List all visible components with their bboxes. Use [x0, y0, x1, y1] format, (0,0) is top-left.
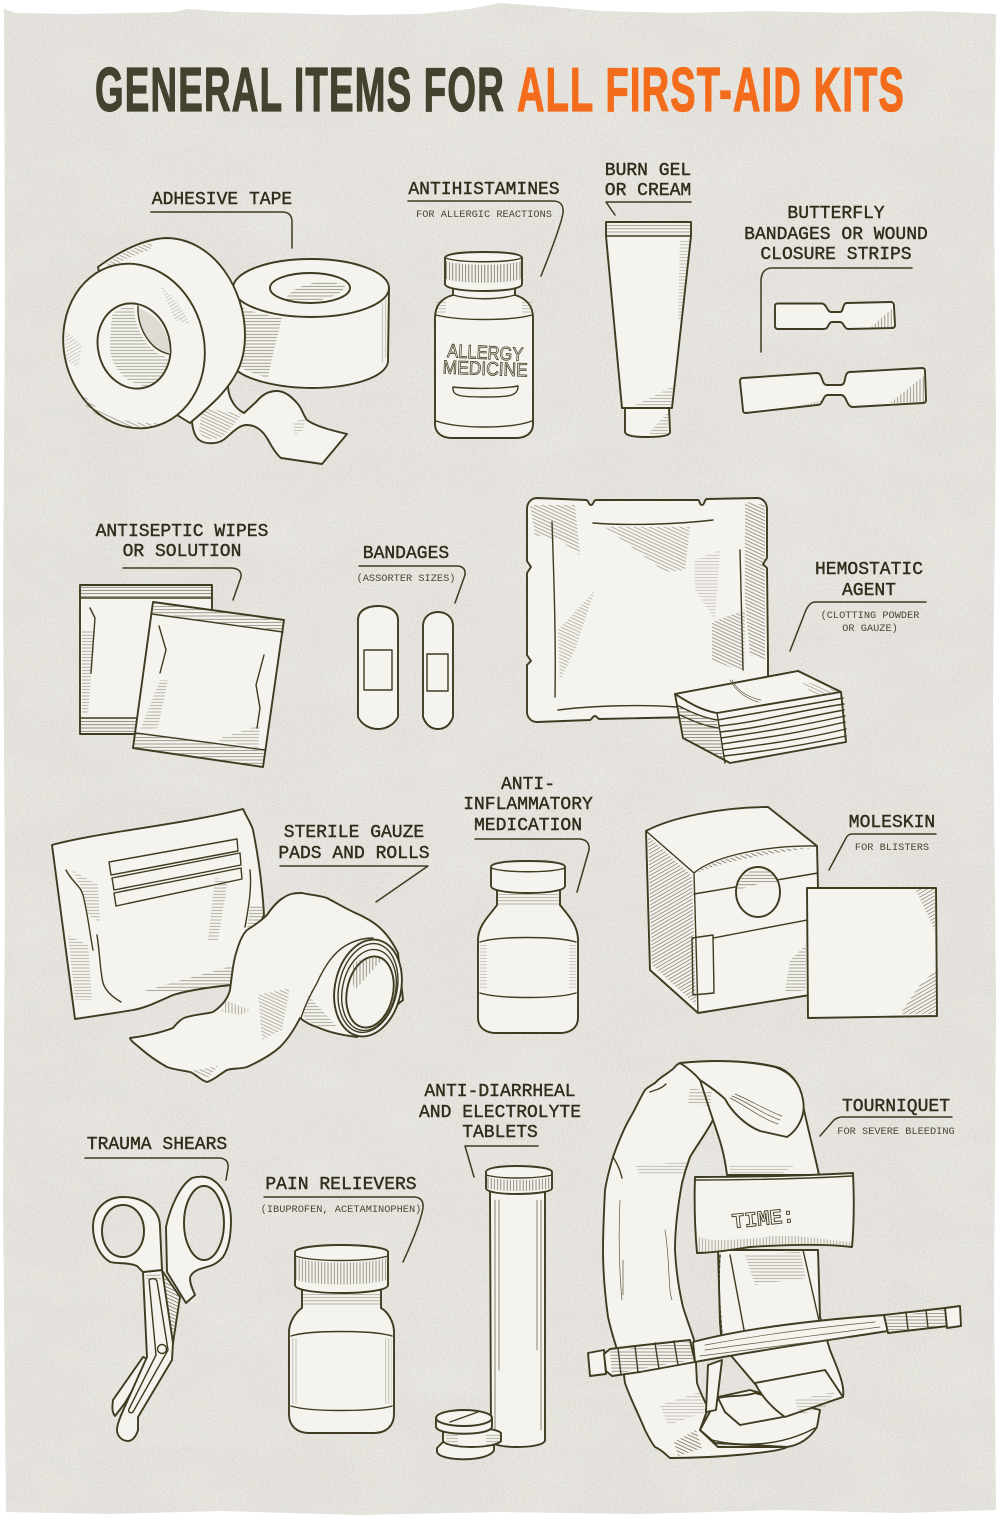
sublabel: ibuprofen: (IBUPROFEN, ACETAMINOPHEN) — [261, 1204, 421, 1216]
label: antiseptic wipes: ANTISEPTIC WIPES — [96, 522, 268, 542]
item: pain relievers — [261, 1175, 423, 1433]
title: GENERAL ITEMS FOR — [95, 55, 505, 125]
icon: tilted tape roll — [46, 238, 245, 443]
leader: antiseptic — [123, 568, 241, 600]
label: burn gel: BURN GEL — [605, 161, 691, 181]
item: butterfly bandages: CLOSURE STRIPS — [760, 245, 912, 265]
icon: tablets — [436, 1410, 501, 1459]
leader: gauze — [280, 866, 428, 902]
icon: allergy medicine bottle: MEDICINE — [442, 358, 528, 381]
icon: moleskin pad — [807, 888, 937, 1018]
leader: antihistamines — [408, 201, 563, 276]
icon: medication bottle — [478, 861, 578, 1033]
item: anti-diarrheal tablets: AND ELECTROLYTE — [419, 1103, 581, 1123]
item: moleskin — [646, 807, 937, 1018]
item: gauze pads and rolls — [52, 809, 430, 1082]
strap back — [700, 1062, 819, 1175]
icon: gauze roll — [130, 893, 410, 1082]
item: butterfly bandages — [740, 204, 928, 413]
leader: bandages — [359, 566, 465, 603]
sublabel: severe bleeding: FOR SEVERE BLEEDING — [837, 1126, 955, 1138]
label: bandages: BANDAGES — [363, 544, 449, 564]
time band — [695, 1173, 854, 1253]
icon: tourniquet — [588, 1061, 961, 1458]
icon: gauze stack — [675, 671, 846, 763]
icon: trauma shears — [93, 1177, 231, 1441]
icon: allergy medicine bottle — [435, 252, 533, 438]
item: tourniquet — [588, 1061, 961, 1458]
outer band — [603, 1063, 787, 1458]
leader: burn gel — [606, 202, 691, 215]
item: anti-diarrheal tablets: TABLETS — [462, 1123, 538, 1143]
time text: TIME: — [731, 1206, 796, 1235]
label: anti-diarrheal: ANTI-DIARRHEAL — [424, 1082, 576, 1102]
leader: pain relievers — [264, 1197, 423, 1262]
item: burn gel — [605, 161, 691, 437]
leader: tourniquet — [820, 1117, 952, 1136]
sublabel: clotting: (CLOTTING POWDER — [821, 610, 919, 622]
item: hemostatic agent — [527, 498, 926, 763]
label: tourniquet: TOURNIQUET — [842, 1097, 950, 1117]
item: gauze pads and rolls: PADS AND ROLLS — [278, 844, 430, 864]
item: burn gel: OR CREAM — [605, 181, 691, 201]
label: adhesive tape: ADHESIVE TAPE — [152, 190, 292, 210]
item: antihistamines — [408, 180, 563, 438]
left handle — [93, 1197, 162, 1272]
label: pain relievers: PAIN RELIEVERS — [265, 1175, 417, 1195]
sublabel: allergic reactions: FOR ALLERGIC REACTIONS — [416, 209, 552, 221]
item: anti-inflammatory: INFLAMMATORY — [463, 795, 593, 815]
icon: narrow bandage — [423, 612, 453, 729]
label: butterfly bandages: BUTTERFLY — [787, 204, 885, 224]
hook and loop flap — [680, 1061, 804, 1137]
icon: pain reliever bottle — [289, 1245, 394, 1433]
sublabel: sizes: (ASSORTER SIZES) — [357, 573, 455, 585]
rear blade — [112, 1357, 150, 1416]
item: hemostatic agent: AGENT — [842, 581, 896, 601]
bottle label text: ALLERGY — [447, 341, 524, 366]
front blade — [117, 1270, 173, 1441]
item: anti-inflammatory — [463, 775, 593, 1033]
icon: large butterfly strip — [740, 368, 926, 413]
label: gauze: STERILE GAUZE — [284, 823, 424, 843]
item: anti-diarrheal tablets — [419, 1082, 581, 1459]
item: bandages — [357, 544, 465, 729]
icon: tape strip unrolling — [191, 360, 347, 464]
rear tang — [158, 1272, 180, 1343]
item: anti-inflammatory: MEDICATION — [474, 816, 582, 836]
sublabel: blisters: FOR BLISTERS — [855, 842, 929, 854]
leader: hemostatic — [790, 602, 926, 651]
label: anti-inflammatory: ANTI- — [501, 775, 555, 795]
label: antihistamines: ANTIHISTAMINES — [408, 180, 560, 200]
item: hemostatic agent: OR GAUZE) — [842, 623, 898, 635]
item: antiseptic wipes — [80, 522, 284, 767]
icon: tablet tube — [486, 1166, 552, 1447]
leader: anti-inflammatory — [475, 839, 589, 892]
leader: shears — [85, 1158, 228, 1180]
pivot — [158, 1344, 166, 1354]
label: moleskin: MOLESKIN — [849, 813, 935, 833]
icon: gel tube — [606, 222, 691, 437]
icon: front wipe packet — [133, 602, 284, 767]
icon: upright tape roll — [233, 259, 389, 388]
icon: rear wipe packet — [80, 585, 212, 734]
leader: butterfly — [761, 268, 912, 352]
item: butterfly bandages: BANDAGES OR WOUND — [744, 225, 928, 245]
icon: gauze pouch — [52, 809, 264, 1019]
icon: wide bandage — [358, 606, 398, 729]
lower strap — [718, 1250, 843, 1417]
leader: anti-diarrheal — [465, 1146, 538, 1177]
leader: moleskin — [829, 834, 936, 870]
icon: hemostatic packet — [527, 498, 768, 722]
item: antiseptic wipes: OR SOLUTION — [123, 542, 241, 562]
icon: moleskin box — [646, 807, 818, 1013]
leader: adhesive tape — [151, 212, 292, 248]
right handle — [166, 1177, 231, 1303]
windlass rod — [588, 1306, 961, 1376]
item: trauma shears — [85, 1135, 231, 1441]
item: adhesive tape — [46, 190, 389, 464]
label: hemostatic: HEMOSTATIC — [815, 560, 923, 580]
label: shears: TRAUMA SHEARS — [87, 1135, 227, 1155]
icon: small butterfly strip — [775, 302, 895, 329]
buckle assembly — [674, 1360, 843, 1456]
